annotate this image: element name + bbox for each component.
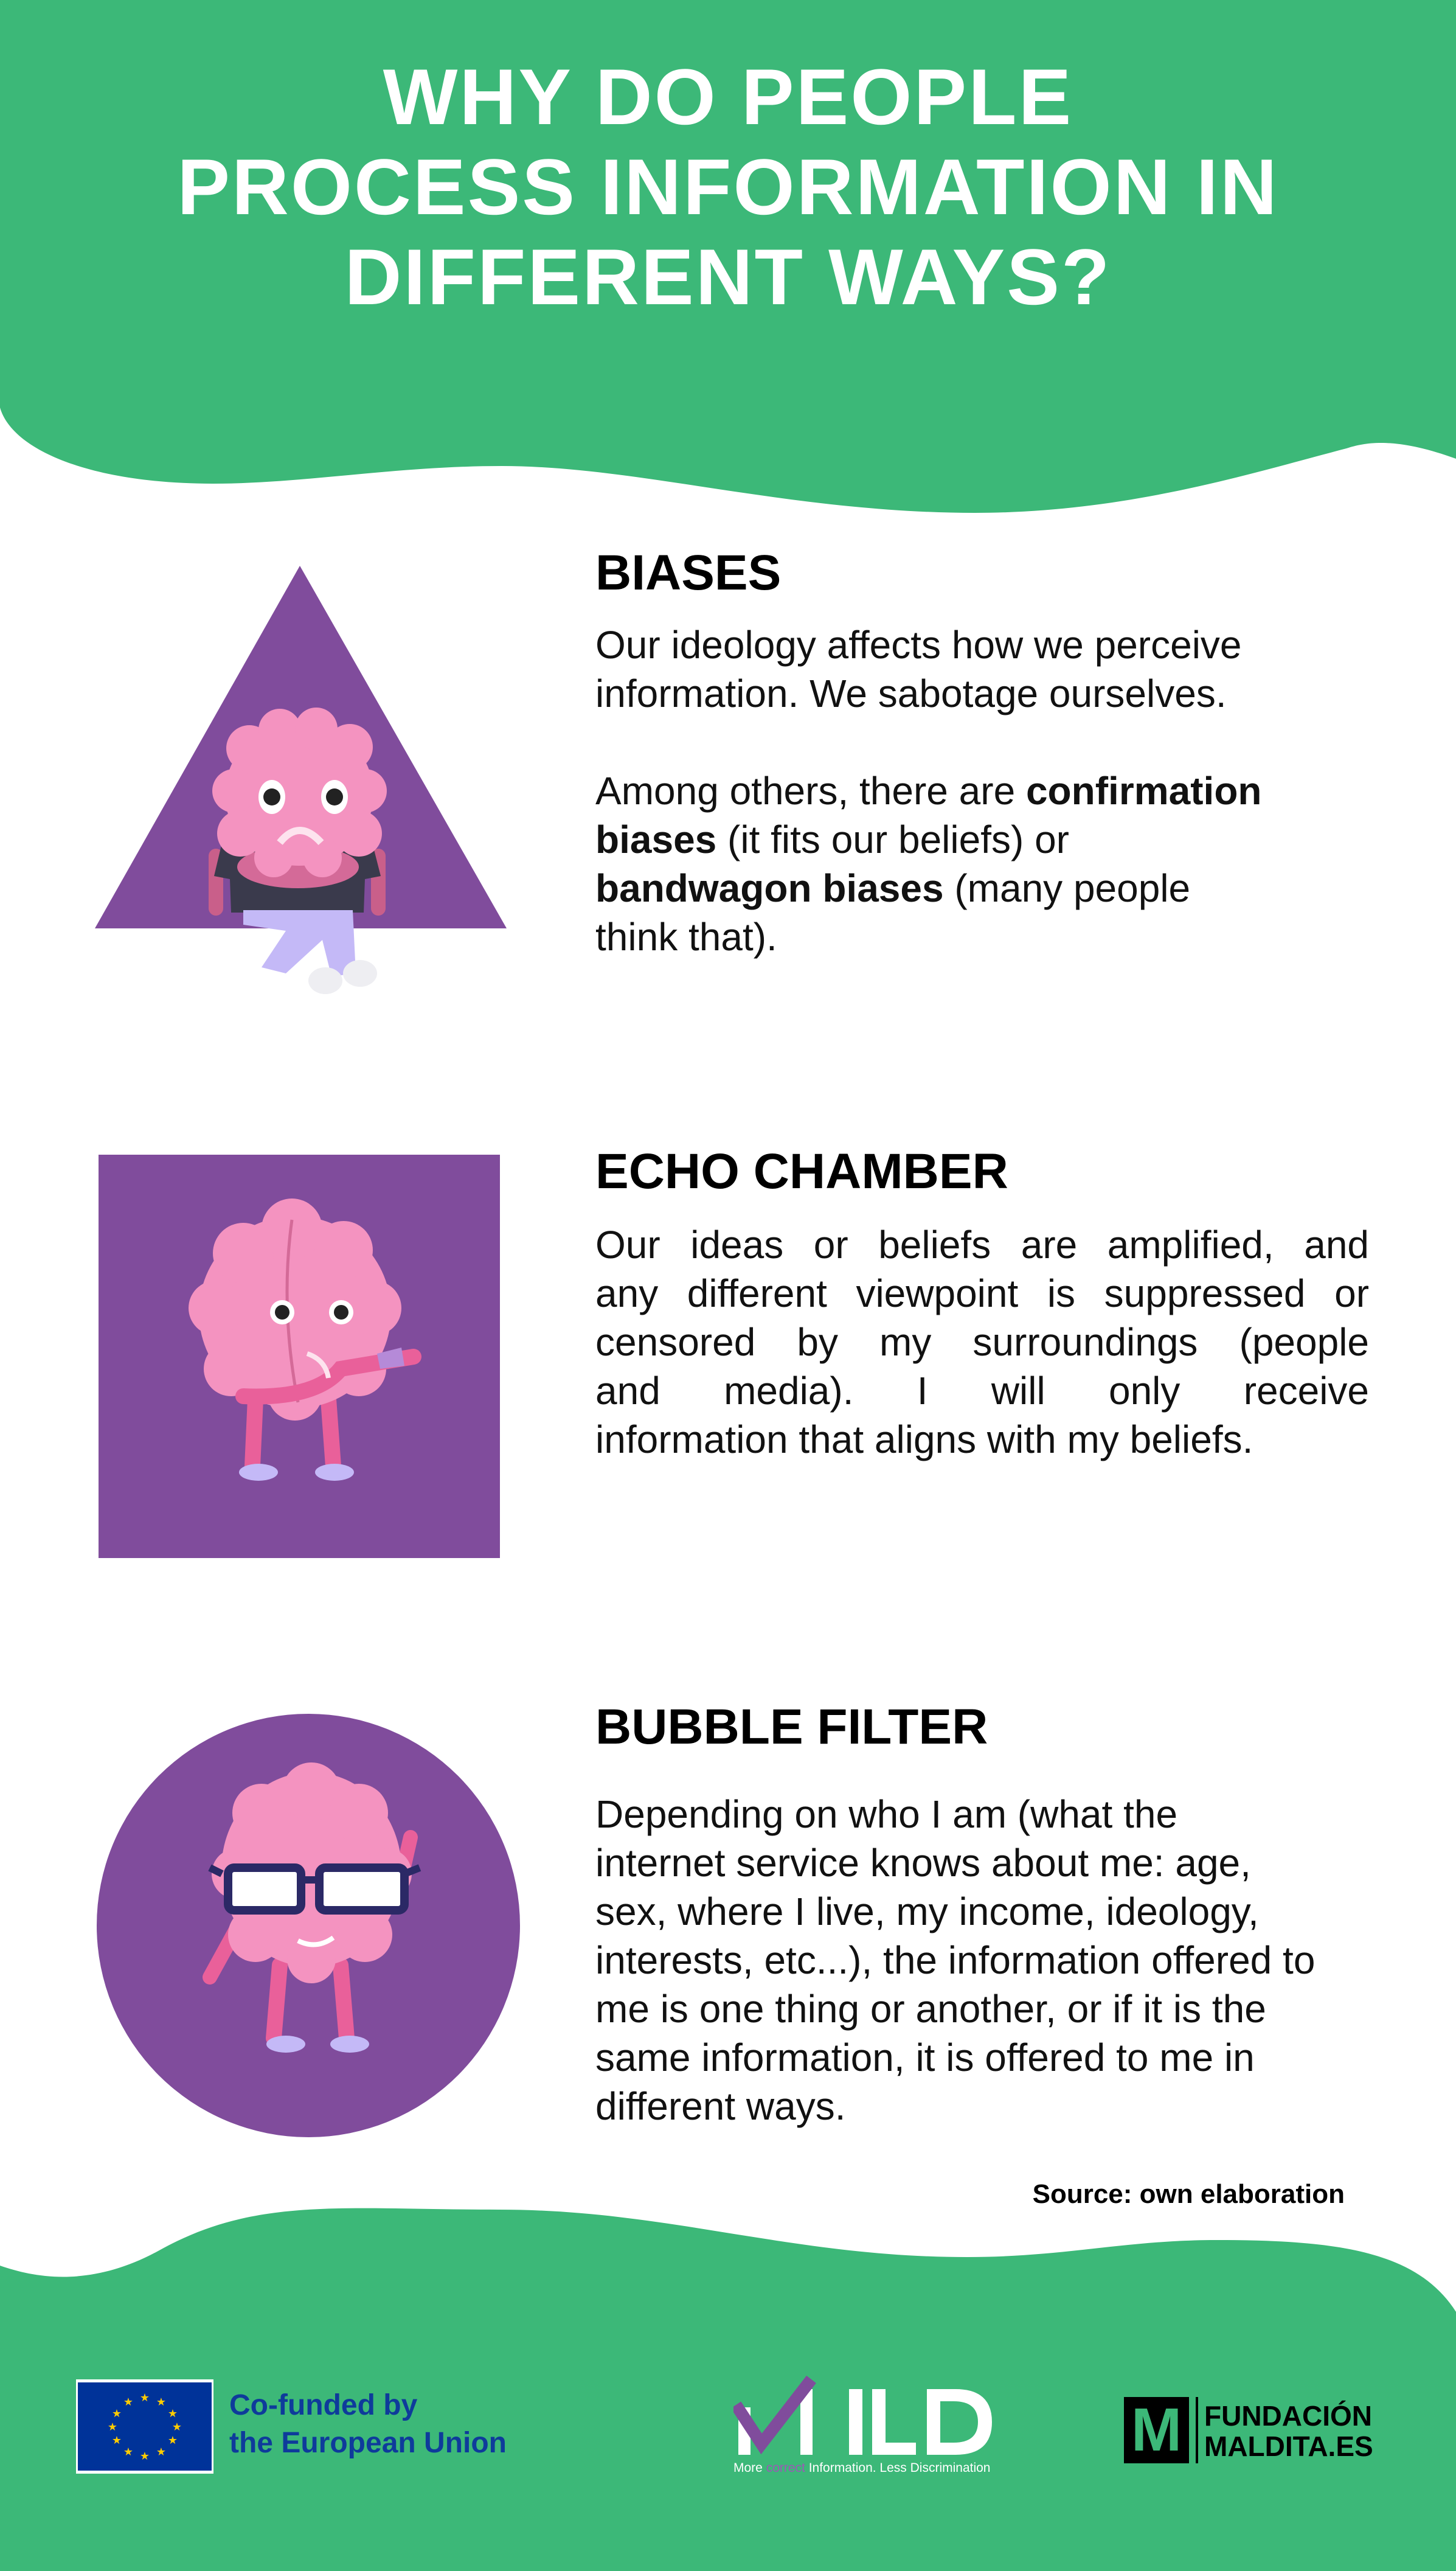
title: DIFFERENT WAYS? — [345, 232, 1111, 321]
brain: echo chamber — [189, 1199, 414, 1481]
logo: EU: ★ — [168, 2407, 178, 2420]
text: echo chamber: any different viewpoint is suppressed or — [595, 1272, 1369, 1315]
logo: Fundación Maldita: MALDITA.ES — [1204, 2430, 1373, 2462]
logo: Fundación Maldita: FUNDACIÓN — [1204, 2400, 1372, 2432]
logo: MILD — [733, 2376, 992, 2475]
logo: EU: ★ — [140, 2392, 150, 2404]
heading: biases: BIASES — [595, 545, 781, 600]
logo: EU: ★ — [108, 2421, 117, 2433]
text: bubble filter: internet service knows about me: age, — [595, 1841, 1251, 1885]
logo: EU: Co-funded by — [229, 2389, 417, 2421]
text: biases: information. We sabotage ourselves. — [595, 672, 1227, 715]
text: echo chamber: censored by my surroundings (people — [595, 1320, 1369, 1364]
text: echo chamber — [595, 1223, 1369, 1461]
text: bubble filter: interests, etc...), the information offered to — [595, 1938, 1315, 1982]
source: Source: own elaboration — [1033, 2179, 1345, 2209]
logo: EU: ★ — [172, 2421, 182, 2433]
text: bubble filter: me is one thing or another, or if it is the — [595, 1987, 1266, 2031]
title: WHY DO PEOPLE — [383, 52, 1073, 141]
logo: MILD: More correct Information. Less Discrimination — [733, 2461, 990, 2475]
title — [177, 52, 1279, 321]
logo: EU: ★ — [123, 2396, 133, 2408]
brain: biases sad sitting — [209, 708, 387, 994]
logo: EU: ★ — [156, 2396, 166, 2408]
header wave — [0, 0, 1456, 513]
circle — [97, 1714, 520, 2137]
logo: Fundación Maldita — [1124, 2396, 1373, 2464]
brain: bubble filter glasses — [210, 1762, 420, 2053]
heading: bubble filter: BUBBLE FILTER — [595, 1699, 988, 1755]
text: echo chamber: Our ideas or beliefs are amplified, and — [595, 1223, 1369, 1267]
text: biases: Our ideology affects how we perceive — [595, 623, 1242, 667]
footer wave — [0, 2208, 1456, 2571]
logo: Fundación Maldita: M — [1131, 2396, 1182, 2464]
text: bubble filter: same information, it is offered to me in — [595, 2036, 1255, 2079]
text: biases: think that). — [595, 915, 777, 959]
triangle — [95, 566, 507, 928]
title: PROCESS INFORMATION IN — [177, 142, 1279, 231]
logo: EU: ★ — [140, 2450, 150, 2462]
text: bubble filter: different ways. — [595, 2084, 845, 2128]
text: bubble filter — [595, 1792, 1315, 2128]
square — [99, 1155, 500, 1558]
heading: echo chamber: ECHO CHAMBER — [595, 1144, 1008, 1199]
text: bubble filter: sex, where I live, my income, ideology, — [595, 1890, 1259, 1933]
logo: EU: ★ — [112, 2407, 122, 2420]
text: biases: bandwagon biases (many people — [595, 866, 1190, 910]
text: echo chamber: information that aligns with my beliefs. — [595, 1418, 1253, 1461]
logo: EU: ★ — [123, 2446, 133, 2458]
text: bubble filter: Depending on who I am (what the — [595, 1792, 1177, 1836]
text: echo chamber: and media). I will only receive — [595, 1369, 1369, 1413]
text: biases — [595, 623, 1261, 959]
logo: EU — [76, 2379, 507, 2474]
logo: EU: ★ — [112, 2434, 122, 2446]
logo: EU: the European Union — [229, 2427, 507, 2459]
text: biases: Among others, there are confirmation — [595, 769, 1261, 813]
logo: EU: ★ — [168, 2434, 178, 2446]
text: biases: biases (it fits our beliefs) or — [595, 818, 1069, 861]
logo: EU: ★ — [156, 2446, 166, 2458]
